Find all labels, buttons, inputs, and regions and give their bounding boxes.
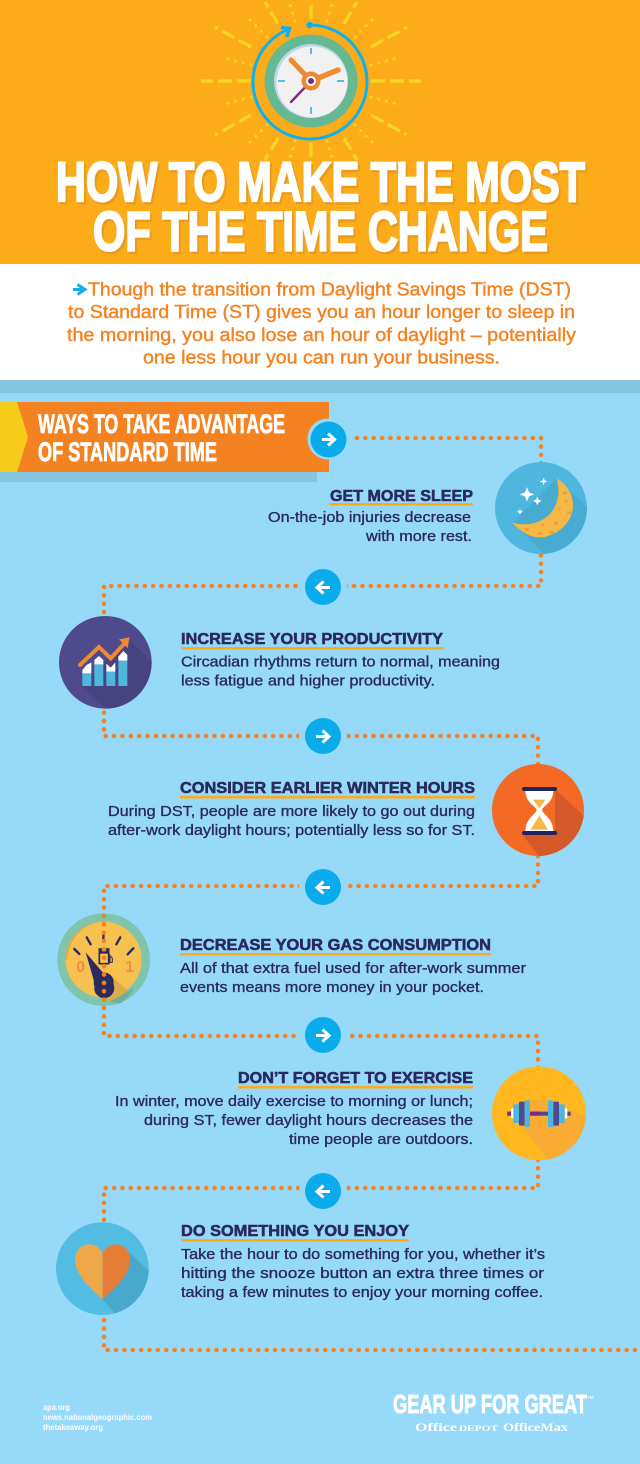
sources [43, 1403, 152, 1432]
text: don't forget to exercise: time people are outdoors. [289, 1131, 473, 1148]
text: decrease your gas consumption [180, 937, 526, 996]
divider strip [0, 380, 640, 393]
icon: dumbbell [492, 1066, 590, 1165]
title [56, 150, 587, 265]
text: get more sleep: On-the-job injuries decrease [268, 509, 471, 526]
logo: office depot officemax: OfficeMax [503, 1420, 568, 1434]
intro text [67, 278, 577, 368]
text: decrease your gas consumption: events means more money in your pocket. [180, 979, 484, 996]
banner heading [38, 409, 285, 467]
sources: news.nationalgeographic.com [43, 1413, 152, 1422]
intro text: Though the transition from Daylight Savings Time (DST) [88, 278, 571, 300]
icon: gas gauge: 1 [125, 959, 134, 976]
logo: office depot officemax: Office [415, 1420, 458, 1434]
text: do something you enjoy: hitting the snooze button an extra three times or [181, 1265, 544, 1282]
text: consider earlier winter hours: CONSIDER EARLIER WINTER HOURS [180, 780, 475, 797]
dotted connector path [104, 438, 640, 1350]
text: don't forget to exercise: In winter, move daily exercise to morning or lunch; [115, 1093, 473, 1110]
arrow button: left 1 [299, 563, 347, 611]
text: consider earlier winter hours [108, 780, 475, 839]
icon: gas gauge: 0 [76, 959, 85, 976]
arrow button: right 2 [299, 1011, 347, 1059]
logo: office depot officemax: DEPOT [459, 1423, 498, 1433]
text: increase your productivity: less fatigue and higher productivity. [181, 672, 435, 690]
icon: heart [56, 1222, 153, 1317]
banner heading: OF STANDARD TIME [38, 437, 217, 467]
text: get more sleep: with more rest. [365, 528, 472, 545]
banner heading: WAYS TO TAKE ADVANTAGE [38, 409, 285, 439]
text: don't forget to exercise [115, 1070, 473, 1148]
text: increase your productivity: INCREASE YOUR PRODUCTIVITY [181, 631, 444, 648]
text: do something you enjoy: taking a few minutes to enjoy your morning coffee. [181, 1284, 543, 1301]
arrow button: right 1 [299, 712, 347, 760]
arrow button: left 2 [299, 863, 347, 911]
icon: growth chart [59, 616, 155, 712]
text: do something you enjoy: DO SOMETHING YOU ENJOY [181, 1223, 410, 1240]
text: do something you enjoy: Take the hour to do something for you, whether it’s [181, 1246, 545, 1263]
text: do something you enjoy [181, 1223, 545, 1301]
icon: intro arrow [73, 284, 85, 294]
intro text: one less hour you can run your business. [143, 346, 500, 368]
text: consider earlier winter hours: after-work daylight hours; potentially less so for ST. [108, 822, 475, 839]
text: consider earlier winter hours: During DST, people are more likely to go out during [108, 803, 475, 820]
sources: thetakeaway.org [43, 1423, 103, 1432]
icon: hourglass [492, 764, 587, 862]
text: get more sleep: GET MORE SLEEP [330, 488, 473, 505]
banner: ways to take advantage [0, 402, 329, 482]
intro text: to Standard Time (ST) gives you an hour longer to sleep in [68, 301, 575, 322]
icon: gas gauge [57, 913, 150, 1006]
icon: sun rays [201, 0, 421, 171]
logo: gear up for great: ™ [587, 1396, 594, 1403]
text: increase your productivity: Circadian rhythms return to normal, meaning [181, 654, 500, 670]
icon: clock [253, 22, 367, 139]
icon: moon [495, 462, 590, 557]
text: get more sleep [268, 488, 473, 545]
text: decrease your gas consumption: All of that extra fuel used for after-work summer [180, 960, 526, 977]
sources: apa.org [43, 1403, 70, 1412]
intro panel [0, 264, 640, 380]
text: don't forget to exercise: DON’T FORGET TO EXERCISE [238, 1070, 473, 1087]
header panel [0, 0, 640, 265]
logo: office depot officemax [415, 1420, 568, 1434]
text: don't forget to exercise: during ST, fewer daylight hours decreases the [144, 1112, 473, 1129]
text: decrease your gas consumption: DECREASE YOUR GAS CONSUMPTION [180, 937, 491, 954]
logo: gear up for great [393, 1389, 594, 1434]
intro text: the morning, you also lose an hour of daylight – potentially [67, 324, 577, 345]
arrow button: start [308, 418, 348, 460]
text: increase your productivity [181, 631, 500, 690]
arrow button: left 3 [299, 1167, 347, 1215]
